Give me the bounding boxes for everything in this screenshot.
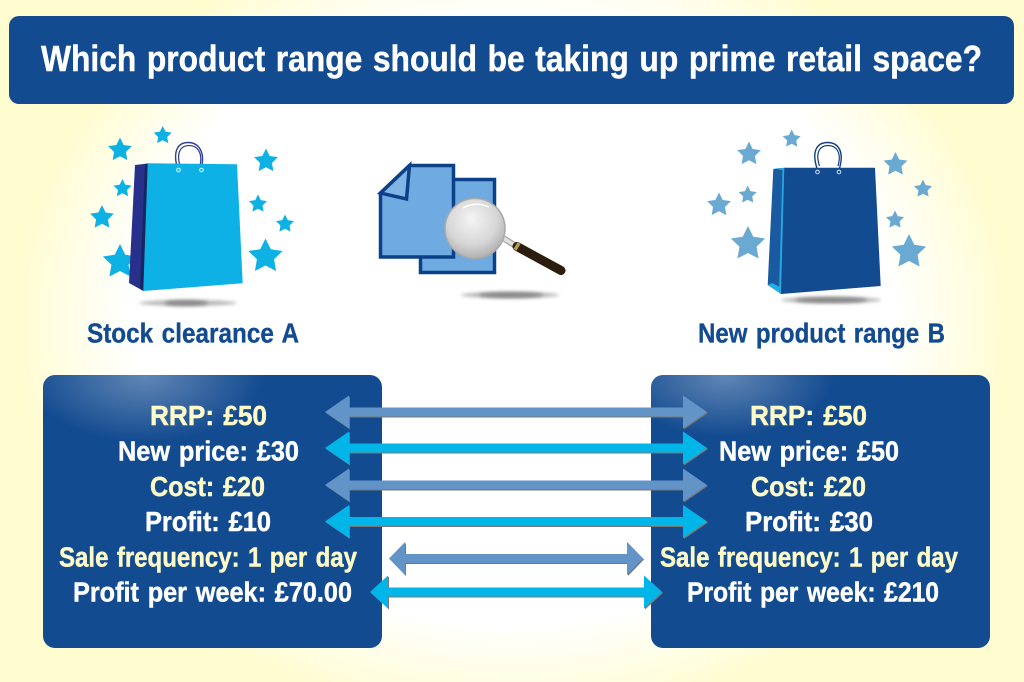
row: new price B: New price: £50 bbox=[719, 436, 899, 466]
icon: stars around bag B bbox=[707, 130, 932, 267]
row: cost A: Cost: £20 bbox=[150, 471, 265, 502]
row: sale frequency B: Sale frequency: 1 per day bbox=[660, 542, 958, 572]
icon: stars around bag A bbox=[90, 126, 294, 277]
row: RRP A: RRP: £50 bbox=[150, 400, 267, 431]
row: sale frequency A: Sale frequency: 1 per day bbox=[59, 542, 357, 572]
title banner bbox=[9, 16, 1014, 104]
row: cost B: Cost: £20 bbox=[751, 471, 866, 502]
arrow: new price comparison bbox=[325, 432, 707, 464]
icon: shopping bag B bbox=[768, 142, 881, 303]
arrow: profit comparison bbox=[325, 505, 707, 538]
row: profit per week A: Profit per week: £70.00 bbox=[73, 576, 352, 608]
arrow: profit per week comparison bbox=[370, 576, 662, 608]
label: new product range B: New product range B bbox=[698, 318, 945, 348]
panel: new product range B figures bbox=[651, 375, 990, 648]
row: profit A: Profit: £10 bbox=[145, 506, 271, 537]
arrow: RRP comparison bbox=[325, 396, 707, 428]
icon: documents and magnifying glass bbox=[380, 166, 561, 298]
arrow: cost comparison bbox=[325, 468, 707, 502]
row: profit per week B: Profit per week: £210 bbox=[687, 576, 939, 608]
row: new price A: New price: £30 bbox=[118, 436, 299, 466]
row: profit B: Profit: £30 bbox=[745, 506, 873, 537]
icon: shopping bag A bbox=[129, 142, 243, 306]
row: RRP B: RRP: £50 bbox=[750, 400, 867, 431]
label: stock clearance A: Stock clearance A bbox=[87, 318, 299, 348]
arrow: sale frequency comparison bbox=[389, 542, 643, 575]
panel: stock clearance A figures bbox=[43, 375, 382, 648]
